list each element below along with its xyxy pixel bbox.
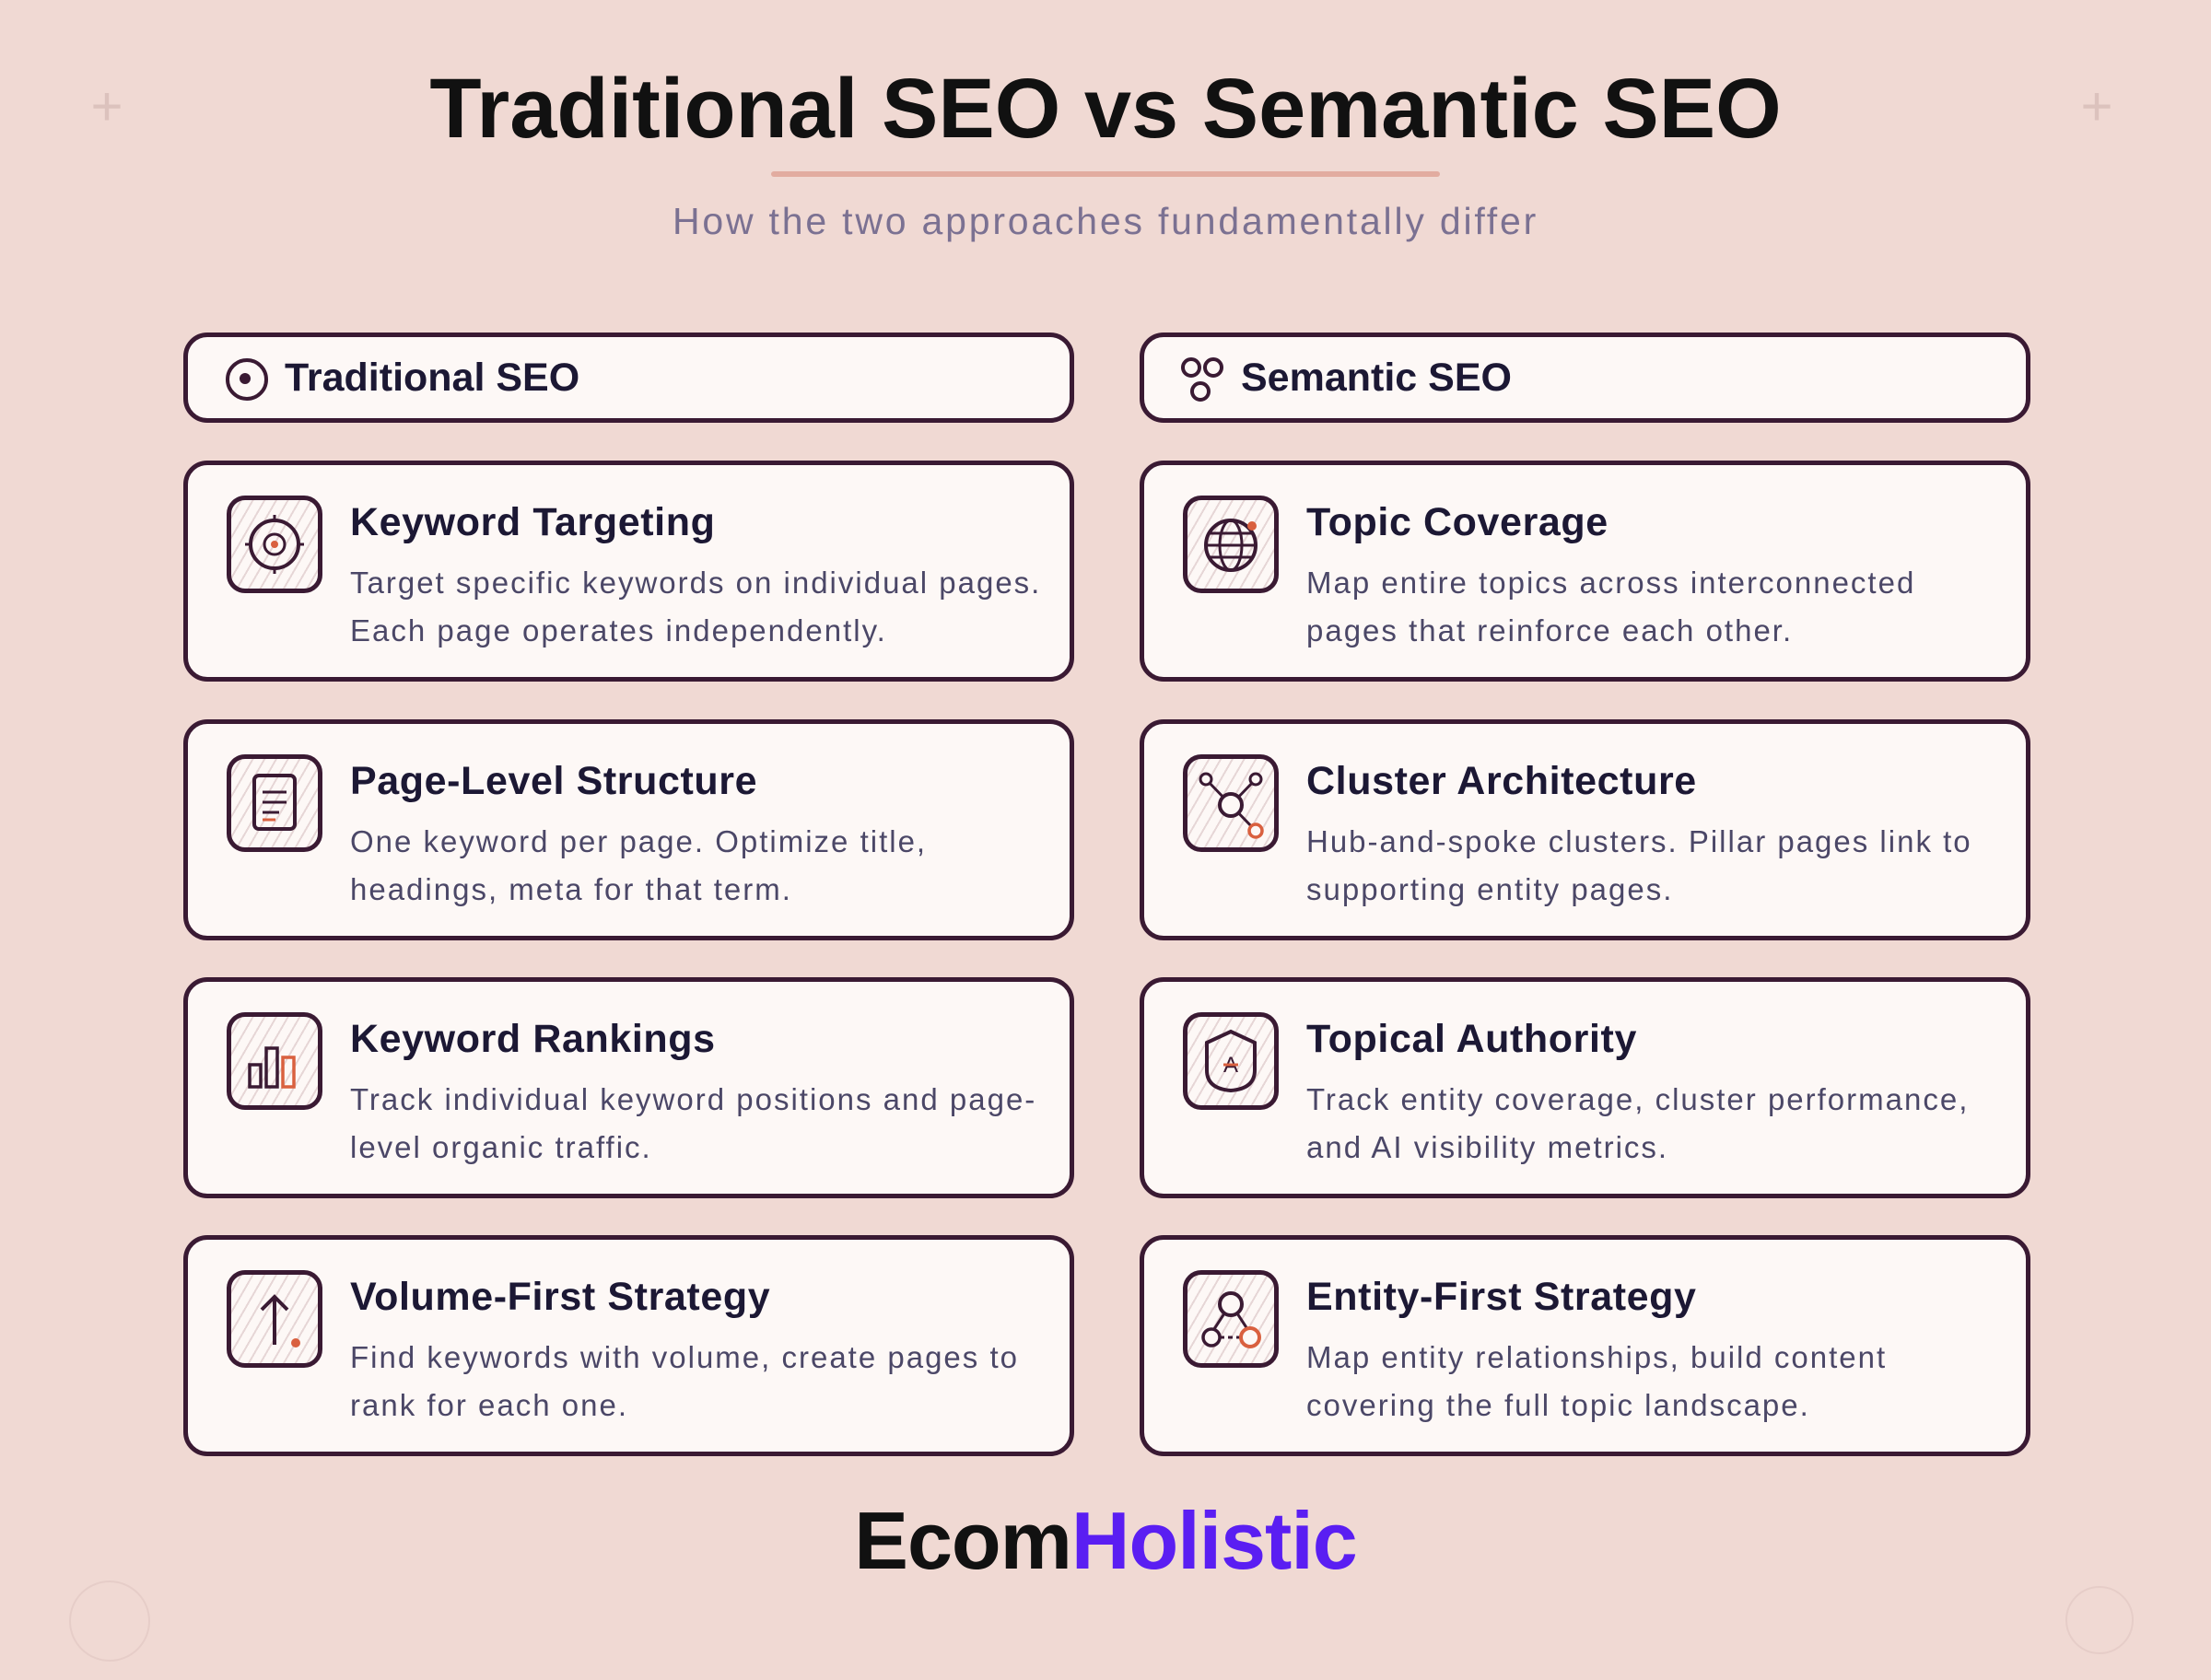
icon: globe [1183,496,1279,593]
decorative circle left [69,1581,150,1662]
card: Volume-First Strategy: rank for each one. [350,1388,628,1422]
title underline [771,171,1440,177]
subtitle: How the two approaches fundamentally differ [673,200,1538,242]
footer logo: EcomHolistic [854,1495,1357,1586]
icon: entity graph [1183,1270,1279,1368]
card: Cluster Architecture: supporting entity pages. [1306,872,1673,906]
card: Topic Coverage: Map entire topics across interconnected [1306,566,1915,600]
card: Volume-First Strategy [183,1235,1074,1456]
card: Page-Level Structure [183,719,1074,940]
card: Topical Authority [1140,977,2030,1198]
card: Topical Authority: Track entity coverage, cluster performance, [1306,1082,1969,1116]
card: Topical Authority: Topical Authority [1306,1017,1637,1061]
card: Page-Level Structure: headings, meta for that term. [350,872,792,906]
card: Keyword Rankings: level organic traffic. [350,1130,652,1164]
decorative plus left: + [90,76,123,137]
card: Keyword Rankings [183,977,1074,1198]
card: Volume-First Strategy: Find keywords with volume, create pages to [350,1340,1019,1374]
card: Topic Coverage: Topic Coverage [1306,500,1609,544]
icon: shield: A [1223,1053,1238,1078]
card: Cluster Architecture [1140,719,2030,940]
card: Entity-First Strategy: covering the full topic landscape. [1306,1388,1810,1422]
card: Entity-First Strategy: Entity-First Strategy [1306,1275,1697,1319]
card: Entity-First Strategy: Map entity relationships, build content [1306,1340,1887,1374]
icon: shield [1183,1012,1279,1110]
card: Topic Coverage: pages that reinforce each other. [1306,613,1793,648]
icon: three circles [1181,357,1223,402]
column header: Semantic SEO [1140,332,2030,423]
card: Keyword Targeting: Target specific keywords on individual pages. [350,566,1041,600]
card: Page-Level Structure: One keyword per page. Optimize title, [350,824,927,858]
decorative plus right: + [2080,76,2113,137]
card: Entity-First Strategy [1140,1235,2030,1456]
icon: bar chart [227,1012,322,1110]
card: Keyword Rankings: Keyword Rankings [350,1017,716,1061]
card: Keyword Targeting: Each page operates independently. [350,613,887,648]
card: Topic Coverage [1140,461,2030,682]
icon: arrow up [227,1270,322,1368]
card: Volume-First Strategy: Volume-First Strategy [350,1275,770,1319]
card: Keyword Targeting [183,461,1074,682]
icon: target dot [226,358,268,401]
card: Keyword Rankings: Track individual keyword positions and page- [350,1082,1036,1116]
card: Keyword Targeting: Keyword Targeting [350,500,715,544]
icon: document [227,754,322,852]
decorative circle right [2065,1586,2134,1654]
column header: Traditional SEO [183,332,1074,423]
card: Topical Authority: and AI visibility metrics. [1306,1130,1668,1164]
column header: Traditional SEO: Traditional SEO [285,356,579,400]
title: Traditional SEO vs Semantic SEO [429,62,1782,156]
icon: hub and spoke [1183,754,1279,852]
card: Cluster Architecture: Hub-and-spoke clusters. Pillar pages link to [1306,824,1972,858]
card: Cluster Architecture: Cluster Architecture [1306,759,1697,803]
icon: crosshair [227,496,322,593]
card: Page-Level Structure: Page-Level Structure [350,759,757,803]
column header: Semantic SEO: Semantic SEO [1241,356,1512,400]
